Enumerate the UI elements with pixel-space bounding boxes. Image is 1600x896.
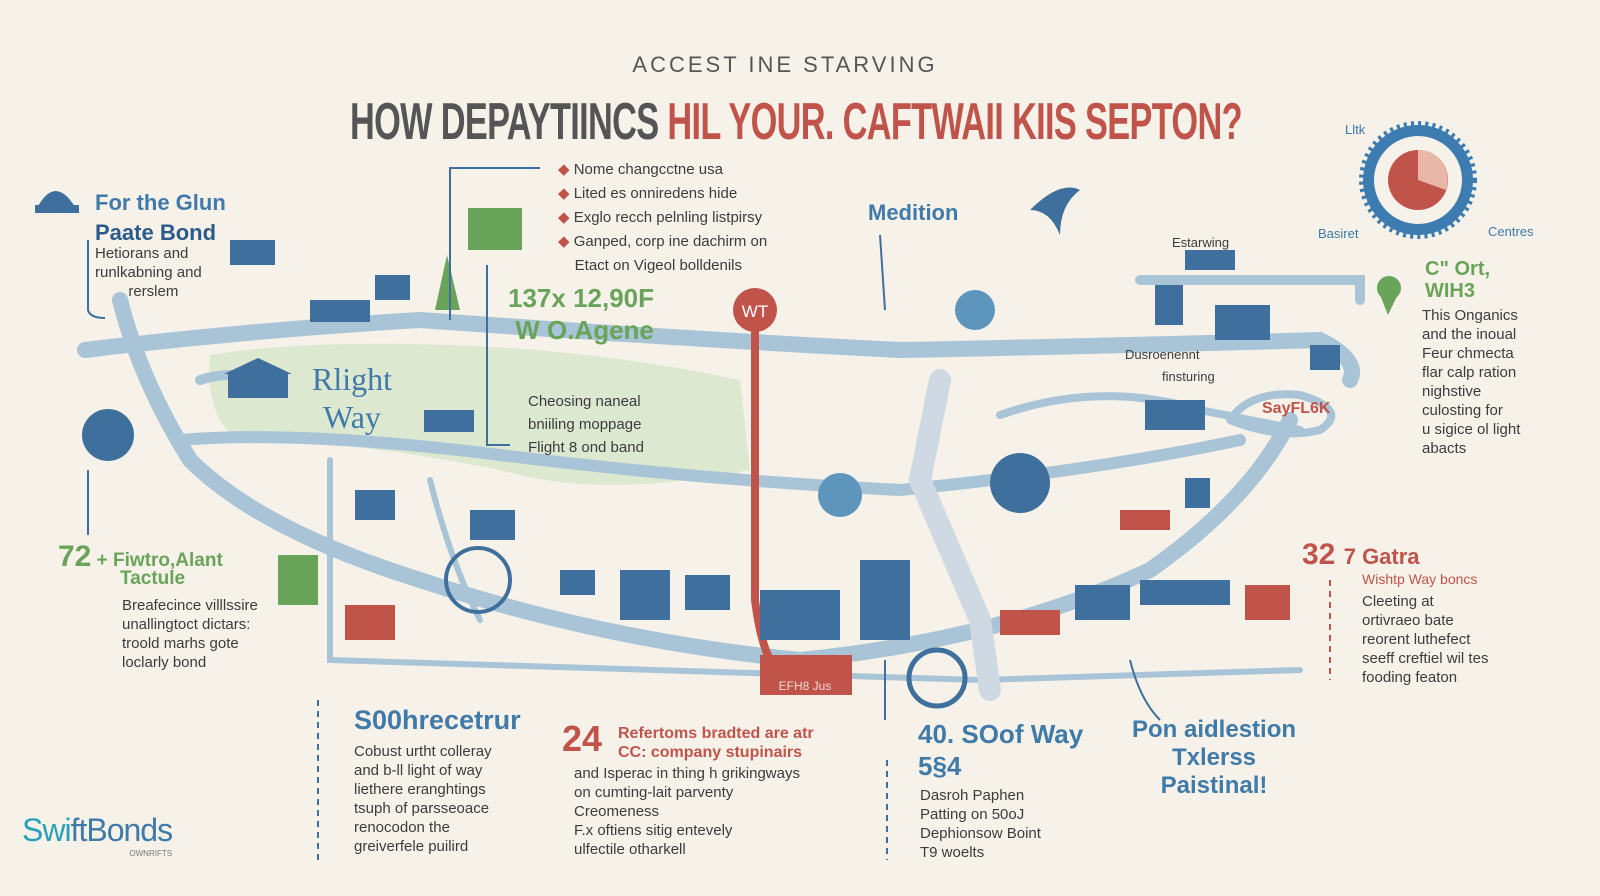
text: liethere eranghtings <box>354 781 486 798</box>
text: reorent luthefect <box>1362 631 1470 648</box>
right way <box>312 361 392 435</box>
text: finsturing <box>1162 369 1215 384</box>
text: culosting for <box>1422 402 1503 419</box>
text: tsuph of parsseoace <box>354 800 489 817</box>
text: rerslem <box>128 283 178 300</box>
text: renocodon the <box>354 819 450 836</box>
bullets <box>558 161 767 274</box>
Pon: Txlerss <box>1172 744 1256 771</box>
text: Dasroh Paphen <box>920 787 1024 804</box>
map: WT <box>742 302 768 321</box>
text: top-left: For the Glun <box>95 190 226 215</box>
text: bniiling moppage <box>528 416 641 433</box>
text: nighstive <box>1422 383 1481 400</box>
bullets: ◆ Nome changcctne usa <box>558 161 723 178</box>
text: greiverfele puilird <box>354 838 468 855</box>
left stat 72: 72 + Fiwtro,Alant <box>58 540 223 573</box>
title: HOW DEPAYTIINCS HIL YOUR. CAFTWAII KIIS SEPTON? <box>350 93 1242 151</box>
24: 24 <box>562 718 602 759</box>
text: unallingtoct dictars: <box>122 616 250 633</box>
text: C" Ort, <box>1425 258 1490 280</box>
text: flar calp ration <box>1422 364 1516 381</box>
text: u sigice ol light <box>1422 421 1520 438</box>
text: runlkabning and <box>95 264 202 281</box>
text: troold marhs gote <box>122 635 239 652</box>
buildings <box>35 191 1340 706</box>
32 stat: 32 7 Gatra <box>1302 538 1420 571</box>
roads <box>85 320 1352 380</box>
text: F.x oftiens sitig entevely <box>574 822 732 839</box>
text: Feur chmecta <box>1422 345 1514 362</box>
text: T9 woelts <box>920 844 984 861</box>
text: Patting on 50oJ <box>920 806 1024 823</box>
text: Estarwing <box>1172 235 1229 250</box>
text: abacts <box>1422 440 1466 457</box>
Pon: Pon aidlestion <box>1132 716 1296 743</box>
bullets: ◆ Exglo recch pelnling listpirsy <box>558 209 762 226</box>
text: Cleeting at <box>1362 593 1434 610</box>
text: top-left <box>95 190 226 245</box>
40: 40. SOof Way <box>918 719 1083 749</box>
text: ulfectile otharkell <box>574 841 686 858</box>
green stat: 137x 12,90F <box>508 283 654 313</box>
text: Dusroenennt <box>1125 347 1199 362</box>
text: Tactule <box>120 568 185 589</box>
right way: Way <box>323 399 381 435</box>
text: and Isperac in thing h grikingways <box>574 765 800 782</box>
map: EFH8 Jus <box>779 679 831 693</box>
green area <box>209 344 750 485</box>
text: Cheosing naneal <box>528 393 641 410</box>
text: Hetiorans and <box>95 245 188 262</box>
text: Dephionsow Boint <box>920 825 1041 842</box>
text: top-left: Paate Bond <box>95 220 216 245</box>
text: Creomeness <box>574 803 659 820</box>
meditation: Medition <box>868 200 958 225</box>
text: This Onganics <box>1422 307 1518 324</box>
bottom: 500h: S00hrecetrur <box>354 705 521 735</box>
text: fooding featon <box>1362 669 1457 686</box>
bullets: ◆ Lited es onniredens hide <box>558 185 737 202</box>
text: Breafecince villlssire <box>122 597 258 614</box>
right way: Rlight <box>312 361 392 397</box>
text: ortivraeo bate <box>1362 612 1454 629</box>
text: Cobust urtht colleray <box>354 743 492 760</box>
logo: SwiftBonds <box>22 812 172 848</box>
text: WIH3 <box>1425 280 1475 302</box>
green stat <box>508 283 654 345</box>
subtitle: ACCEST INE STARVING <box>632 52 938 77</box>
bullets: Etact on Vigeol bolldenils <box>575 257 742 274</box>
right labels: Lltk <box>1345 122 1365 137</box>
text: seeff creftiel wil tes <box>1362 650 1488 667</box>
sun icon <box>1363 125 1473 235</box>
text: on cumting-lait parventy <box>574 784 733 801</box>
red route <box>755 320 770 660</box>
text: SayFL6K <box>1262 400 1330 417</box>
text: and b-ll light of way <box>354 762 482 779</box>
green stat: W O.Agene <box>515 315 654 345</box>
text: Wishtp Way boncs <box>1362 571 1477 587</box>
Pon <box>1132 716 1296 799</box>
text: Refertoms bradted are atr <box>618 725 814 742</box>
Pon: Paistinal! <box>1161 772 1267 799</box>
logo: OWNRIFTS <box>129 849 172 858</box>
text: Basiret <box>1318 226 1358 241</box>
connector lines <box>88 168 1160 860</box>
text: Flight 8 ond band <box>528 439 644 456</box>
text: Centres <box>1488 224 1534 239</box>
40 <box>918 719 1083 781</box>
40: 5§4 <box>918 751 961 781</box>
text: loclarly bond <box>122 654 206 671</box>
bullets: ◆ Ganped, corp ine dachirm on <box>558 233 767 250</box>
text: and the inoual <box>1422 326 1516 343</box>
text: CC: company stupinairs <box>618 744 802 761</box>
